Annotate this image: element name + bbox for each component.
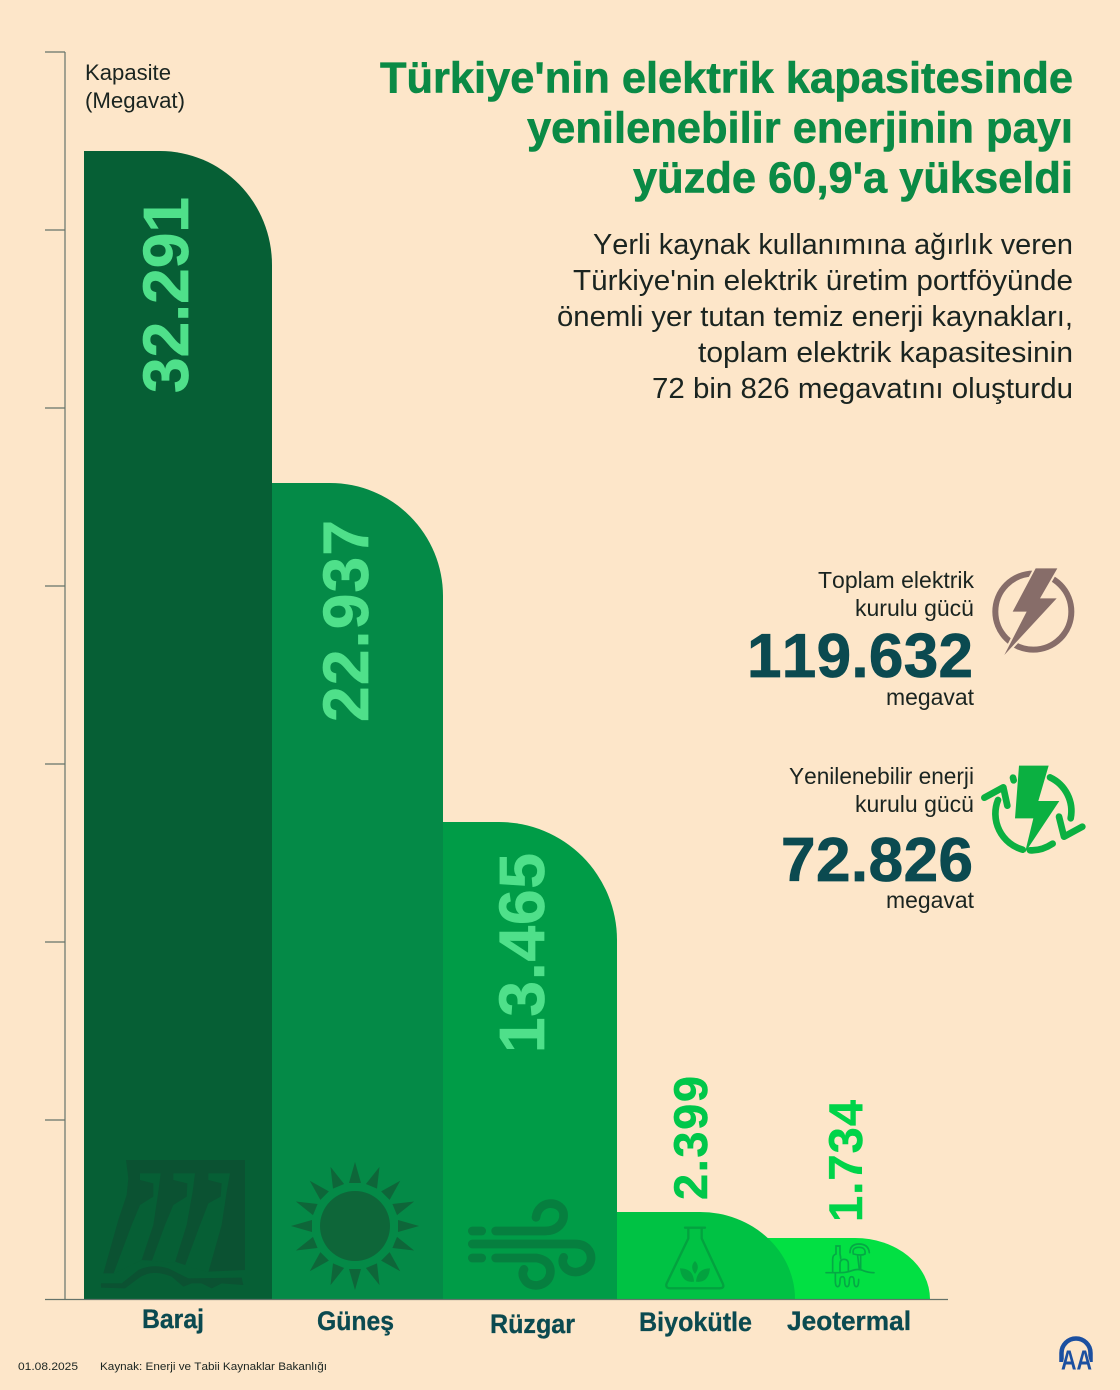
bar: Baraj xyxy=(84,151,272,1299)
footer: source: Kaynak: Enerji ve Tabii Kaynaklar Bakanlığı xyxy=(100,1361,327,1373)
stat: total installed power: megavat xyxy=(886,684,975,710)
stat: total installed power: kurulu gücü xyxy=(855,595,974,621)
baseline xyxy=(45,1298,948,1300)
icon: sun xyxy=(291,1162,419,1290)
axis label xyxy=(85,60,185,113)
value: 22.937: 22.937 xyxy=(310,520,382,722)
subtitle paragraph: önemli yer tutan temiz enerji kaynakları, xyxy=(557,301,1073,333)
stat: renewable installed power: Yenilenebilir enerji xyxy=(789,763,974,789)
subtitle paragraph: 72 bin 826 megavatını oluşturdu xyxy=(652,373,1073,405)
category labels: Jeotermal xyxy=(787,1306,911,1336)
title: yüzde 60,9'a yükseldi xyxy=(633,154,1073,202)
value: 2.399: 2.399 xyxy=(664,1076,717,1200)
title xyxy=(380,54,1073,202)
bar: Güneş xyxy=(272,483,443,1299)
category labels: Baraj xyxy=(142,1304,204,1334)
logo: AA xyxy=(1061,1338,1092,1376)
title: yenilenebilir enerjinin payı xyxy=(527,104,1073,152)
icon: renewable lightning bolt with arrows xyxy=(984,766,1082,853)
axis label: Kapasite xyxy=(85,60,171,85)
bar: Biyokütle xyxy=(617,1212,795,1299)
category labels: Biyokütle xyxy=(639,1307,752,1337)
stat: renewable installed power xyxy=(781,763,975,913)
stat: renewable installed power: 72.826 xyxy=(781,826,973,895)
icon: flask with leaves xyxy=(666,1228,723,1288)
bar: Jeotermal xyxy=(740,1238,930,1299)
value: 32.291: 32.291 xyxy=(130,197,202,393)
stat: total installed power xyxy=(747,567,975,710)
stat: renewable installed power: megavat xyxy=(886,887,975,913)
footer: date: 01.08.2025 xyxy=(18,1361,78,1373)
stat: renewable installed power: kurulu gücü xyxy=(855,791,974,817)
category labels: Güneş xyxy=(317,1306,394,1336)
subtitle paragraph: toplam elektrik kapasitesinin xyxy=(698,337,1073,369)
bar: Rüzgar xyxy=(443,822,617,1299)
subtitle paragraph: Yerli kaynak kullanımına ağırlık veren xyxy=(593,229,1073,261)
icon: wind xyxy=(472,1204,591,1285)
category labels xyxy=(142,1304,911,1339)
icon: geothermal xyxy=(826,1244,874,1287)
stat: total installed power: Toplam elektrik xyxy=(818,567,974,593)
category labels: Rüzgar xyxy=(490,1309,575,1339)
stat: total installed power: 119.632 xyxy=(747,622,973,691)
subtitle paragraph xyxy=(557,229,1073,405)
y axis xyxy=(45,52,65,1299)
icon: dam xyxy=(101,1160,245,1288)
axis label: (Megavat) xyxy=(85,88,185,113)
value: 1.734: 1.734 xyxy=(819,1100,872,1222)
value: 13.465: 13.465 xyxy=(486,853,558,1053)
icon: lightning bolt in ring xyxy=(995,568,1071,655)
title: Türkiye'nin elektrik kapasitesinde xyxy=(380,54,1073,102)
logo: AA: AA xyxy=(1061,1344,1092,1376)
subtitle paragraph: Türkiye'nin elektrik üretim portföyünde xyxy=(573,265,1073,297)
